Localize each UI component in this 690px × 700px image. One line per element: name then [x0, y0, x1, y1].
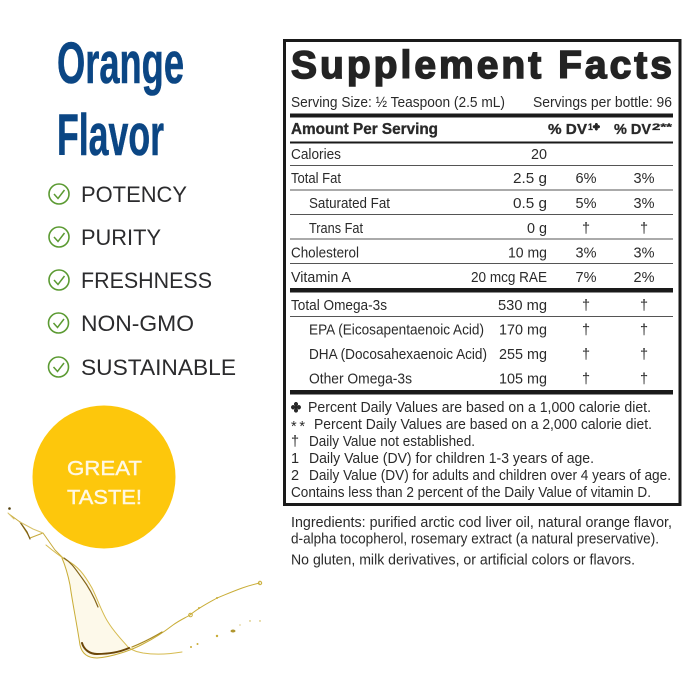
row: vitamin a — [291, 270, 655, 286]
row: dha: DHA (Docosahexaenoic Acid) — [309, 347, 487, 363]
heading: supplement facts: Supplement Facts — [291, 44, 672, 87]
ingredients text — [291, 515, 672, 568]
row: dha: † — [582, 347, 590, 363]
row: other omega-3s: † — [582, 372, 590, 388]
footnotes: 2 — [291, 468, 299, 484]
badge: great taste: GREAT — [67, 457, 143, 480]
serving information: Servings per bottle: 96 — [533, 95, 672, 111]
row: total omega-3s: † — [582, 298, 590, 314]
row: other omega-3s: † — [640, 372, 648, 388]
row: other omega-3s: Other Omega-3s — [309, 372, 412, 388]
item: sustainable: SUSTAINABLE — [81, 355, 236, 380]
row: total omega-3s: † — [640, 298, 648, 314]
row: trans fat: † — [582, 221, 590, 237]
row: trans fat: 0 g — [527, 221, 547, 237]
row: total fat — [291, 171, 655, 187]
row: total fat: 6% — [576, 171, 597, 187]
row: calories: Calories — [291, 147, 341, 163]
row: saturated fat: Saturated Fat — [309, 196, 390, 212]
footnotes: 1 — [291, 451, 299, 467]
footnotes: Percent Daily Values are based on a 2,000 calorie diet. — [314, 417, 652, 433]
illustration: oil splash — [8, 507, 262, 658]
row: cholesterol: 3% — [634, 246, 655, 262]
footnotes: Daily Value (DV) for children 1-3 years of age. — [309, 451, 594, 467]
footnotes: ** — [291, 419, 305, 435]
column headers — [291, 121, 673, 138]
footnotes: Daily Value not established. — [309, 434, 475, 450]
row: vitamin a: 20 mcg RAE — [471, 270, 547, 286]
row: epa: 170 mg — [499, 322, 547, 338]
row: trans fat — [309, 221, 648, 237]
row: saturated fat: 5% — [576, 196, 597, 212]
row: other omega-3s — [309, 372, 648, 388]
serving information — [291, 95, 672, 111]
panel: supplement facts — [284, 40, 680, 504]
row: vitamin a: Vitamin A — [291, 270, 351, 286]
badge: great taste — [32, 406, 176, 548]
row: saturated fat — [309, 196, 655, 212]
row: total fat: 2.5 g — [513, 171, 547, 187]
row: epa — [309, 322, 648, 338]
row: epa: † — [640, 322, 648, 338]
row: total omega-3s: 530 mg — [498, 298, 547, 314]
column headers: 1✤ — [588, 122, 600, 132]
item: purity: PURITY — [81, 225, 161, 250]
row: saturated fat: 3% — [634, 196, 655, 212]
title: Orange Flavor — [57, 31, 184, 168]
footnotes: ✤ — [291, 400, 301, 415]
title: Orange Flavor: Flavor — [57, 103, 164, 168]
row: total fat: 3% — [634, 171, 655, 187]
row: vitamin a: 2% — [634, 270, 655, 286]
item: potency: POTENCY — [81, 182, 187, 207]
footnotes: Percent Daily Values are based on a 1,000 calorie diet. — [308, 400, 651, 416]
column headers: Amount Per Serving — [291, 121, 438, 138]
row: vitamin a: 7% — [576, 270, 597, 286]
ingredients text: d-alpha tocopherol, rosemary extract (a natural preservative). — [291, 532, 659, 548]
ingredients text: No gluten, milk derivatives, or artificial colors or flavors. — [291, 552, 635, 568]
row: cholesterol: Cholesterol — [291, 246, 359, 262]
row: total omega-3s — [291, 298, 648, 314]
row: cholesterol: 3% — [576, 246, 597, 262]
footnotes: Contains less than 2 percent of the Daily Value of vitamin D. — [291, 485, 651, 501]
title: Orange Flavor: Orange — [57, 31, 184, 96]
row: calories: 20 — [531, 147, 547, 163]
row: total omega-3s: Total Omega-3s — [291, 298, 387, 314]
checklist of qualities — [48, 182, 236, 380]
row: cholesterol — [291, 246, 655, 262]
row: trans fat: Trans Fat — [309, 221, 363, 237]
row: dha — [309, 347, 648, 363]
serving information: Serving Size: ½ Teaspoon (2.5 mL) — [291, 95, 505, 111]
row: dha: 255 mg — [499, 347, 547, 363]
row: cholesterol: 10 mg — [508, 246, 547, 262]
footnotes: † — [291, 434, 299, 450]
column headers: % DV — [548, 121, 587, 138]
row: other omega-3s: 105 mg — [499, 372, 547, 388]
row: epa: † — [582, 322, 590, 338]
item: freshness: FRESHNESS — [81, 268, 212, 293]
column headers: 2** — [652, 122, 673, 132]
footnotes — [291, 400, 671, 501]
row: epa: EPA (Eicosapentaenoic Acid) — [309, 322, 484, 338]
row: calories — [291, 147, 547, 163]
column headers: % DV — [614, 121, 651, 138]
badge: great taste: TASTE! — [67, 486, 142, 509]
item: non-gmo: NON-GMO — [81, 311, 194, 336]
row: trans fat: † — [640, 221, 648, 237]
ingredients text: Ingredients: purified arctic cod liver oil, natural orange flavor, — [291, 515, 672, 531]
footnotes: Daily Value (DV) for adults and children over 4 years of age. — [309, 468, 671, 484]
row: dha: † — [640, 347, 648, 363]
row: saturated fat: 0.5 g — [513, 196, 547, 212]
row: total fat: Total Fat — [291, 171, 341, 187]
